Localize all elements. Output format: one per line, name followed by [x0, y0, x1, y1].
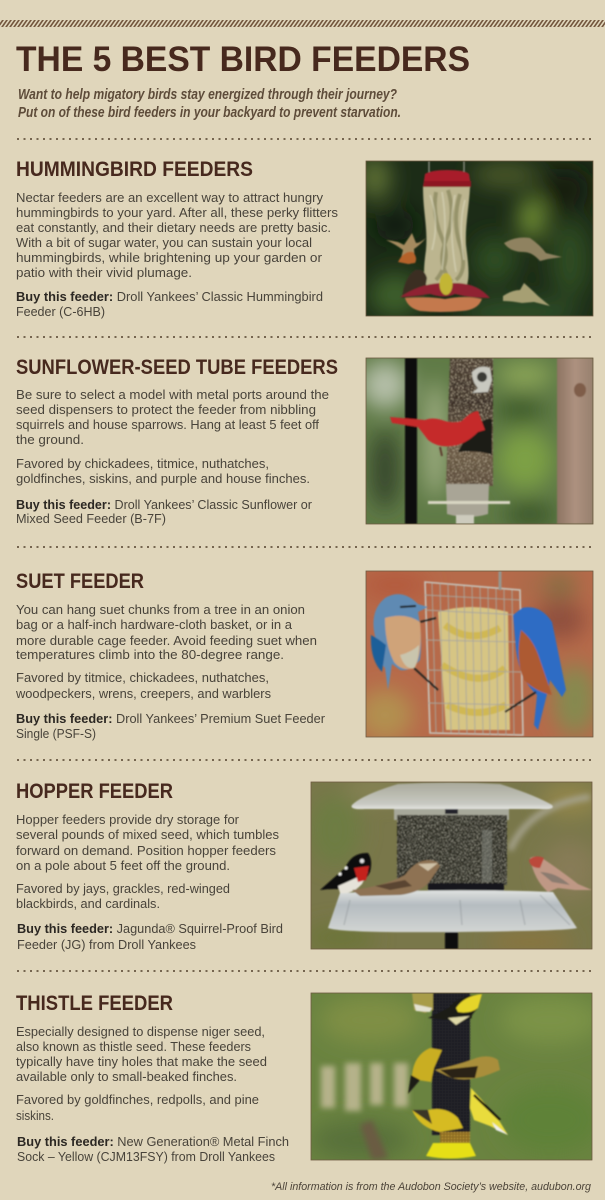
title: THE 5 BEST BIRD FEEDERS — [16, 40, 470, 79]
text block: suet description: Buy this feeder: Droll Yankees’ Premium Suet Feeder — [16, 711, 326, 726]
text block: sunflower description: seed dispensers to protect the feeder from nibbling — [16, 402, 316, 417]
photo borders — [311, 161, 593, 1160]
text block: suet description: more durable cage feeder. Avoid feeding suet when — [16, 633, 317, 648]
subtitle: Want to help migatory birds stay energized through their journey? — [18, 87, 397, 103]
photo: birds on hopper feeder — [304, 780, 600, 954]
text block: hopper description: several pounds of mixed seed, which tumbles — [16, 827, 279, 842]
panel: hopper feeder — [16, 780, 600, 954]
text block: hummingbird description: Nectar feeders are an excellent way to attract hungry — [16, 190, 324, 205]
bluebird left — [373, 594, 428, 690]
text block: suet description: Favored by titmice, chickadees, nuthatches, — [16, 670, 269, 685]
heading: sunflower-seed tube feeders: SUNFLOWER-SEED TUBE FEEDERS — [16, 356, 338, 379]
text block: hummingbird description: hummingbirds to your yard. After all, these perky flitters — [16, 205, 339, 220]
text block: thistle description: also known as thistle seed. These feeders — [16, 1039, 251, 1054]
text block: hopper description: Favored by jays, grackles, red-winged — [16, 881, 230, 896]
footnote: *All information is from the Audobon Society’s website, audubon.org — [271, 1181, 592, 1193]
photo: cardinal on tube feeder — [361, 358, 593, 529]
goldfinch top right — [428, 994, 477, 1020]
goldfinch top left — [412, 993, 433, 1013]
text block: hummingbird description: Buy this feeder: Droll Yankees’ Classic Hummingbird — [16, 289, 323, 304]
text block: hummingbird description: patio with their vivid plumage. — [16, 265, 192, 280]
hummingbird bottom right — [503, 283, 550, 306]
panel: thistle feeder — [16, 992, 600, 1164]
panel: suet feeder — [15, 569, 597, 741]
text block: thistle description: typically have tiny holes that make the seed — [16, 1054, 267, 1069]
goldfinch bottom right — [470, 1088, 508, 1135]
female grosbeak — [352, 860, 440, 896]
text block: thistle description: Favored by goldfinches, redpolls, and pine — [16, 1092, 259, 1107]
text block: hopper description: Buy this feeder: Jagunda® Squirrel-Proof Bird — [17, 921, 283, 936]
text block: hopper description: on a pole about 5 feet off the ground. — [16, 858, 230, 873]
text block: sunflower description: Favored by chickadees, titmice, nuthatches, — [16, 456, 269, 471]
text block: suet description — [15, 602, 326, 741]
text block: hummingbird description: With a bit of sugar water, you can sustain your local — [16, 235, 312, 250]
lower left hummingbird — [402, 270, 427, 298]
hummingbird right — [504, 238, 562, 261]
house finch — [530, 856, 592, 892]
heading: suet feeder: SUET FEEDER — [16, 570, 144, 593]
text block: suet description: bag or a half-inch hardware-cloth basket, or in a — [16, 617, 293, 632]
text block: suet description: Single (PSF-S) — [16, 726, 96, 741]
photo: bluebirds on suet cage — [357, 569, 597, 741]
subtitle — [18, 87, 401, 121]
text block: thistle description: siskins. — [16, 1108, 54, 1123]
text block: sunflower description: the ground. — [16, 432, 84, 447]
text block: hopper description: blackbirds, and cardinals. — [16, 896, 160, 911]
rose-breasted grosbeak — [320, 853, 371, 890]
text block: suet description: You can hang suet chunks from a tree in an onion — [16, 602, 305, 617]
text block: hummingbird description — [16, 190, 339, 319]
text block: thistle description: available only to small-beaked finches. — [16, 1069, 237, 1084]
goldfinch bottom left — [412, 1109, 463, 1132]
text block: sunflower description: Be sure to select a model with metal ports around the — [16, 387, 329, 402]
text block: sunflower description — [16, 387, 329, 526]
text block: thistle description: Especially designed to dispense niger seed, — [16, 1024, 265, 1039]
text block: hummingbird description: eat constantly, and their dietary needs are pretty basic. — [16, 220, 331, 235]
heading: thistle feeder: THISTLE FEEDER — [16, 992, 173, 1015]
panel: hummingbird feeders — [16, 156, 593, 324]
text block: hummingbird description: Feeder (C-6HB) — [16, 304, 105, 319]
text block: sunflower description: Mixed Seed Feeder (B-7F) — [16, 511, 166, 526]
panel: sunflower-seed tube feeders — [16, 356, 593, 529]
goldfinch mid right — [435, 1056, 500, 1079]
text block: sunflower description: goldfinches, siskins, and purple and house finches. — [16, 471, 310, 486]
hummingbird left — [386, 232, 426, 257]
text block: hummingbird description: hummingbirds, while brightening up your garden or — [16, 250, 323, 265]
text block: sunflower description: Buy this feeder: Droll Yankees’ Classic Sunflower or — [16, 497, 313, 512]
text block: thistle description: Buy this feeder: New Generation® Metal Finch — [17, 1134, 289, 1149]
photo: goldfinches on thistle feeder — [310, 993, 600, 1160]
bluebird right — [513, 607, 566, 730]
photo: hummingbirds at nectar feeder — [366, 161, 593, 316]
goldfinch mid left — [410, 1046, 443, 1084]
text block: suet description: temperatures climb into the 80-degree range. — [16, 647, 284, 662]
heading: hopper feeder: HOPPER FEEDER — [16, 780, 173, 803]
text block: thistle description — [16, 1024, 289, 1164]
text block: hopper description: forward on demand. Position hopper feeders — [16, 843, 277, 858]
text block: hopper description — [16, 812, 283, 952]
text block: hopper description: Feeder (JG) from Droll Yankees — [17, 937, 196, 952]
top hatched band — [0, 20, 605, 27]
text block: thistle description: Sock – Yellow (CJM13FSY) from Droll Yankees — [17, 1149, 275, 1164]
heading: hummingbird feeders: HUMMINGBIRD FEEDERS — [16, 158, 253, 181]
subtitle: Put on of these bird feeders in your backyard to prevent starvation. — [18, 105, 401, 121]
text block: suet description: woodpeckers, wrens, creepers, and warblers — [15, 686, 271, 701]
text block: hopper description: Hopper feeders provide dry storage for — [16, 812, 240, 827]
text block: sunflower description: squirrels and house sparrows. Hang at least 5 feet off — [16, 417, 319, 432]
